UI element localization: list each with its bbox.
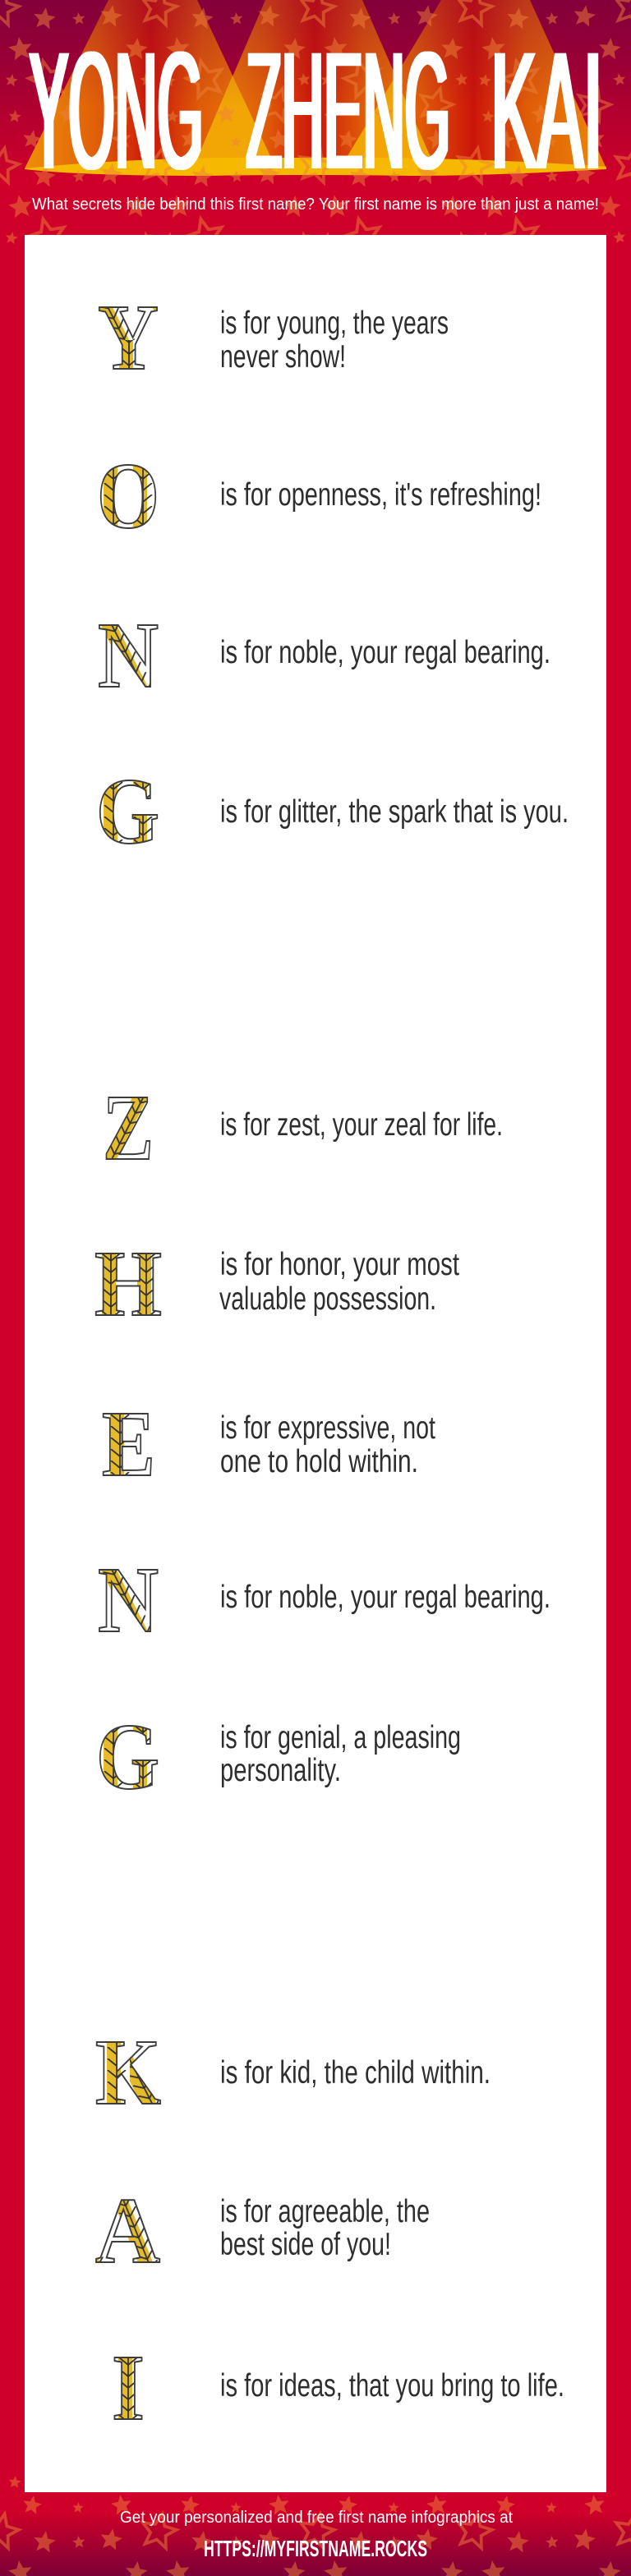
icon: wheat letter Y: Y [98, 285, 159, 389]
text: kid: is for kid, the child within. [220, 2055, 491, 2091]
text: genial [220, 1720, 461, 1788]
row: A [95, 2178, 430, 2283]
text: zest: is for zest, your zeal for life. [220, 1107, 503, 1143]
icon: wheat letter Z: Z [103, 1075, 154, 1180]
icon: wheat letter Y: Y [98, 285, 159, 389]
row: Y [99, 306, 448, 370]
icon: wheat letter G: G [96, 759, 159, 863]
spotlights [0, 0, 631, 176]
text: young: is for young, the years [220, 306, 449, 341]
text: agreeable: best side of you! [220, 2227, 391, 2262]
footer url: HTTPS://MYFIRSTNAME.ROCKS [204, 2536, 427, 2561]
row: H [94, 1231, 459, 1336]
row: G second [96, 1704, 461, 1809]
star pattern: top [0, 0, 631, 251]
text: young [220, 306, 449, 375]
icon: wheat letter Y [99, 306, 158, 370]
footer text: Get your personalized and free first name infographics at [120, 2509, 513, 2527]
row: K [95, 2041, 488, 2104]
text: agreeable [220, 2194, 430, 2262]
row: G [96, 759, 569, 863]
text: honor [219, 1247, 459, 1317]
text: honor: valuable possession. [219, 1281, 436, 1317]
text: expressive: one to hold within. [220, 1444, 418, 1479]
row: N [98, 603, 550, 707]
icon: wheat letter K [95, 2041, 161, 2104]
icon: wheat letter K: K [95, 2020, 161, 2124]
text: genial: is for genial, a pleasing [220, 1720, 461, 1755]
text: expressive: is for expressive, not [220, 1410, 435, 1446]
icon: wheat letter K: K [95, 2020, 161, 2124]
icon: wheat letter E: E [102, 1392, 155, 1496]
row: O [97, 444, 541, 548]
star pattern: bottom [0, 2474, 631, 2576]
text: young: never show! [220, 339, 346, 375]
icon: wheat letter O: O [97, 444, 159, 548]
row: E [102, 1392, 435, 1496]
text: honor: is for honor, your most [220, 1247, 459, 1282]
icon: wheat letter N: N [98, 603, 159, 707]
row: Z [103, 1075, 503, 1180]
icon: wheat letter G: G [96, 1704, 159, 1809]
icon: wheat letter I: I [112, 2335, 145, 2440]
row: I [112, 2335, 564, 2440]
text: genial: personality. [220, 1753, 341, 1788]
title: YONG [30, 17, 204, 205]
icon: wheat letter N: N [98, 1548, 159, 1652]
row: N second [98, 1548, 550, 1652]
icon: wheat letter H: H [94, 1231, 162, 1336]
text: expressive [220, 1410, 435, 1479]
icon: wheat letter A: A [95, 2178, 160, 2283]
text: agreeable: is for agreeable, the [220, 2194, 430, 2229]
